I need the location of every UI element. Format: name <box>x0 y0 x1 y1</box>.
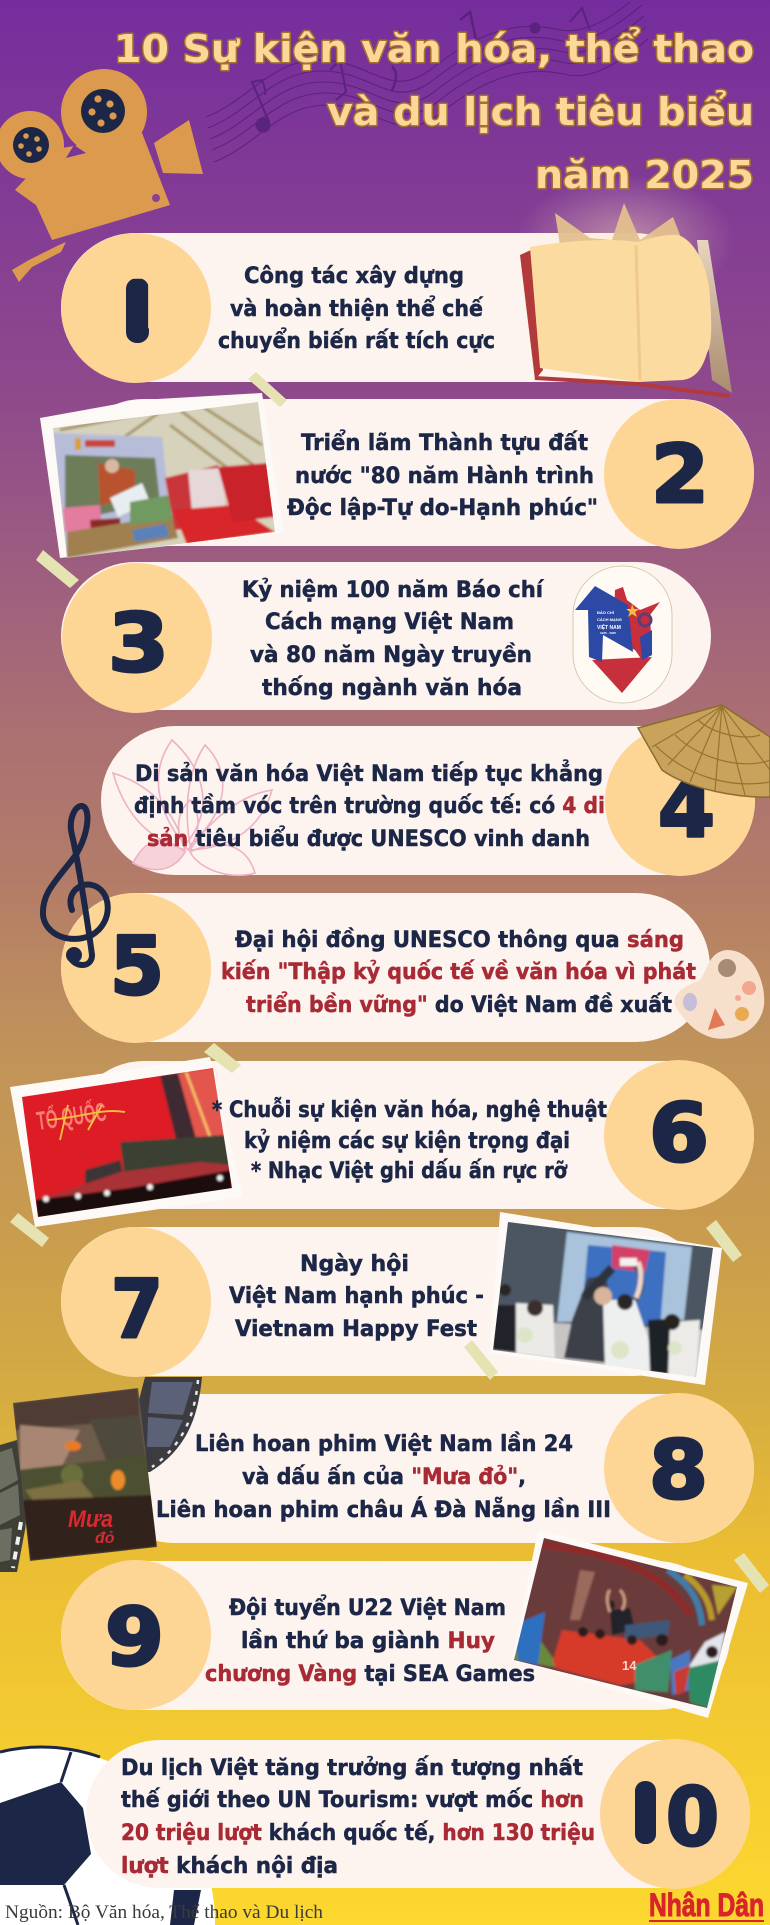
poster: Mưa đỏ <box>10 1385 160 1565</box>
text: item 1: và hoàn thiện thể chế <box>230 296 484 322</box>
tape <box>248 372 287 407</box>
text: item 2: Triển lãm Thành tựu đất <box>301 430 588 456</box>
text: item 5 <box>221 928 696 1018</box>
logo: 100 years press <box>573 566 672 703</box>
text: item 6: * Nhạc Việt ghi dấu ấn rực rỡ <box>251 1159 568 1184</box>
panel: item 8 <box>0 1377 754 1572</box>
number 3: 3 <box>108 597 169 690</box>
text: item 4 <box>134 760 605 852</box>
title: năm 2025 <box>535 153 754 197</box>
logo: 100 years press: BÁO CHÍ <box>597 610 615 615</box>
panel: item 7 <box>61 1212 742 1385</box>
text: item 8 <box>156 1432 611 1523</box>
photo: football team: 14 <box>622 1658 637 1673</box>
panel: item 9 <box>61 1530 769 1718</box>
source line: Nguồn: Bộ Văn hóa, Thể thao và Du lịch <box>5 1902 323 1923</box>
tape <box>464 1340 498 1380</box>
icon: soccer ball <box>0 1747 215 1925</box>
number 2: 2 <box>651 428 709 521</box>
tape <box>706 1220 742 1262</box>
text: item 7: Việt Nam hạnh phúc - <box>229 1284 484 1309</box>
poster: Mưa đỏ: Mưa <box>68 1506 113 1533</box>
icon: paint palette <box>675 950 764 1039</box>
number 10: 1 <box>620 1768 667 1862</box>
text: item 8: và dấu ấn của "Mưa đỏ", <box>242 1465 526 1490</box>
panel: item 3 <box>61 562 711 713</box>
text: item 10: thế giới theo UN Tourism: vượt mốc hơn <box>121 1788 584 1813</box>
logo: 100 years press: 1925 - 2025 <box>600 631 616 635</box>
text: item 1: Công tác xây dựng <box>244 264 464 289</box>
title <box>114 27 754 197</box>
panel: item 6 <box>10 1043 754 1247</box>
poster: Mưa đỏ: đỏ <box>95 1530 115 1547</box>
tape <box>10 1213 49 1247</box>
text: item 5: triển bền vững" do Việt Nam đề xuất <box>246 992 672 1018</box>
text: item 2: Độc lập-Tự do-Hạnh phúc" <box>287 496 598 521</box>
text: item 7 <box>229 1252 484 1342</box>
title: 10 Sự kiện văn hóa, thể thao <box>114 27 754 71</box>
number 9: 9 <box>105 1591 164 1684</box>
icon: treble clef <box>43 806 108 965</box>
text: item 10: Du lịch Việt tăng trưởng ấn tượng nhất <box>121 1756 583 1781</box>
panel: item 4 <box>101 705 770 876</box>
text: item 9: chương Vàng tại SEA Games <box>205 1662 535 1687</box>
text: item 5: Đại hội đồng UNESCO thông qua sáng <box>235 928 684 953</box>
text: item 2 <box>287 430 598 521</box>
text: item 3: và 80 năm Ngày truyền <box>250 643 532 668</box>
photo: concert stage: TỔ QUỐC <box>35 1096 108 1136</box>
text: item 9 <box>205 1595 535 1687</box>
icon: film strip <box>0 1377 202 1572</box>
text: item 6: * Chuỗi sự kiện văn hóa, nghệ thuật <box>212 1098 607 1123</box>
text: item 4: định tầm vóc trên trường quốc tế: có 4 di <box>134 794 605 819</box>
number 10 <box>635 1781 717 1848</box>
text: item 3: Cách mạng Việt Nam <box>265 610 514 635</box>
photo: football team <box>505 1530 748 1718</box>
text: item 4: Di sản văn hóa Việt Nam tiếp tục khẳng <box>135 760 603 787</box>
title: và du lịch tiêu biểu <box>327 90 754 134</box>
tape <box>734 1553 769 1593</box>
icon: lotus outline <box>113 740 272 875</box>
text: item 3 <box>242 578 544 701</box>
logo: 100 years press: CÁCH MẠNG <box>597 617 622 622</box>
icon: open book <box>515 175 735 396</box>
panel: item 1 <box>61 175 735 396</box>
text: item 4: sản tiêu biểu được UNESCO vinh danh <box>147 826 590 852</box>
decoration: music staff <box>206 2 648 162</box>
text: item 3: thống ngành văn hóa <box>262 676 522 701</box>
photo: concert stage <box>10 1057 243 1227</box>
panel: item 2 <box>36 372 754 588</box>
number 4: 4 <box>658 762 715 855</box>
icon: film camera <box>0 69 203 282</box>
text: item 9: lần thứ ba giành Huy <box>241 1629 495 1654</box>
text: item 10: lượt khách nội địa <box>121 1854 338 1879</box>
number 1: 1 <box>111 267 158 361</box>
text: item 5: kiến "Thập kỷ quốc tế về văn hóa vì phát <box>221 960 696 985</box>
text: item 2: nước "80 năm Hành trình <box>295 464 594 489</box>
number 6: 6 <box>649 1087 709 1180</box>
tape <box>204 1043 241 1073</box>
text: item 6 <box>212 1098 607 1184</box>
text: item 8: Liên hoan phim Việt Nam lần 24 <box>195 1432 573 1457</box>
number 5: 5 <box>110 920 164 1013</box>
text: item 10 <box>121 1756 595 1879</box>
panel: item 10 <box>86 1739 750 1889</box>
text: item 7: Ngày hội <box>300 1252 409 1277</box>
text: item 10: 20 triệu lượt khách quốc tế, hơn 130 triệu <box>121 1821 595 1846</box>
text: item 3: Kỷ niệm 100 năm Báo chí <box>242 578 544 603</box>
text: item 1: chuyển biến rất tích cực <box>218 328 495 354</box>
number 8: 8 <box>649 1424 708 1517</box>
photo: exhibition <box>40 393 290 565</box>
text: item 1 <box>218 264 495 354</box>
number 7: 7 <box>111 1263 163 1356</box>
panel: item 5 <box>61 893 764 1043</box>
number 10: 0 <box>666 1771 719 1864</box>
text: item 7: Vietnam Happy Fest <box>235 1317 477 1342</box>
text: item 6: kỷ niệm các sự kiện trọng đại <box>244 1129 570 1154</box>
tape <box>36 550 79 588</box>
icon: conical hat <box>638 705 770 797</box>
logo: 100 years press: VIỆT NAM <box>597 623 621 631</box>
photo: weddings selfie <box>490 1212 722 1385</box>
text: item 9: Đội tuyển U22 Việt Nam <box>229 1595 506 1621</box>
text: item 8: Liên hoan phim châu Á Đà Nẵng lần III <box>156 1497 611 1523</box>
